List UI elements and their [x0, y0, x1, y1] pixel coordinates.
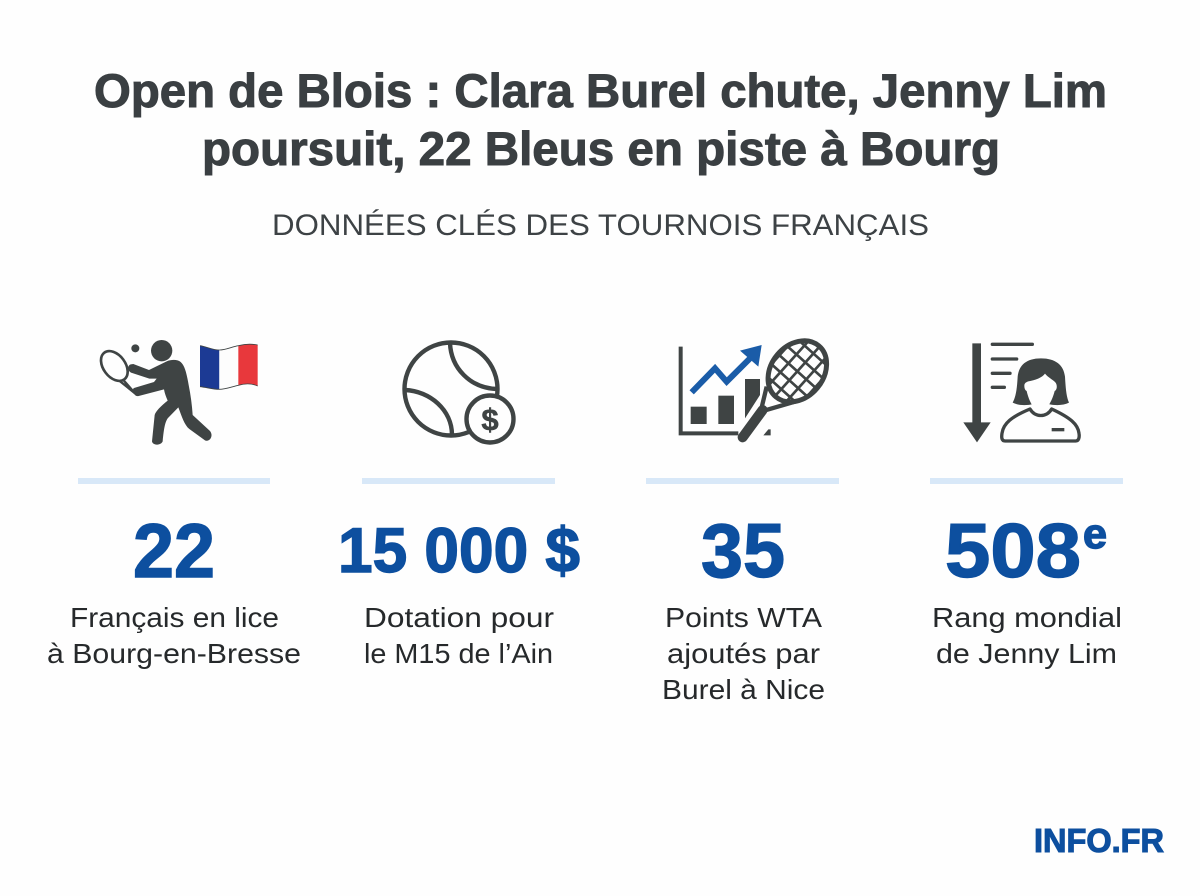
icon: rising chart with racket: [678, 338, 830, 442]
value: 22: [133, 509, 215, 594]
icon: tennis player with French flag: [96, 340, 258, 445]
value: 508: [945, 509, 1081, 594]
title: Open de Blois : Clara Burel chute, Jenny Lim: [94, 64, 1107, 117]
label: [932, 602, 1122, 669]
subtitle: DONNÉES CLÉS DES TOURNOIS FRANÇAIS: [272, 209, 929, 242]
title: [94, 64, 1107, 175]
label: à Bourg-en-Bresse: [47, 638, 301, 669]
divider: [78, 478, 270, 484]
label: Dotation pour: [364, 602, 554, 633]
panel: français en lice: [47, 340, 301, 669]
icon: tennis ball with dollar coin: [404, 342, 514, 442]
icon: tennis ball with dollar coin: $: [481, 402, 499, 437]
divider: [362, 478, 555, 484]
title: poursuit, 22 Bleus en piste à Bourg: [202, 122, 1000, 175]
label: Français en lice: [70, 602, 279, 633]
value: 15 000 $: [338, 516, 580, 586]
label: Points WTA: [665, 602, 822, 633]
label: ajoutés par: [667, 638, 820, 669]
value: e: [1083, 510, 1107, 557]
divider: [930, 478, 1123, 484]
label: [47, 602, 301, 669]
label: [662, 602, 825, 705]
value: 35: [701, 509, 785, 594]
label: Burel à Nice: [662, 674, 825, 705]
panel: dotation: [338, 342, 580, 669]
label: de Jenny Lim: [936, 638, 1117, 669]
label: le M15 de l’Ain: [364, 638, 553, 669]
label: [364, 602, 554, 669]
divider: [646, 478, 839, 484]
panel: rang mondial: [930, 343, 1123, 669]
logo: INFO.FR: [1034, 822, 1164, 859]
icon: ranking arrow with woman: [963, 343, 1079, 442]
label: Rang mondial: [932, 602, 1122, 633]
panel: points WTA: [646, 338, 839, 700]
